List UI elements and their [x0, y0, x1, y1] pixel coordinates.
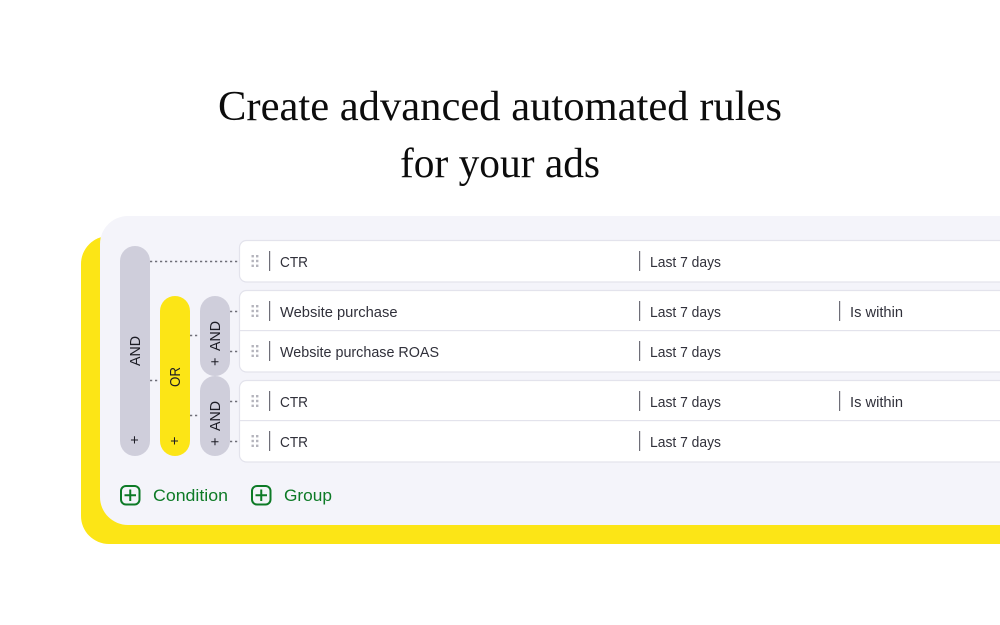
nested AND pill, bottom: AND	[208, 401, 224, 431]
condition group: CTR	[240, 380, 1000, 462]
nested AND pill, top	[200, 296, 230, 376]
outer AND pill: +	[130, 433, 139, 449]
condition group: CTR: CTR	[280, 395, 308, 411]
nested AND pill, top: AND	[208, 321, 224, 351]
title: Create advanced automated rules	[218, 84, 782, 130]
condition group: CTR: CTR	[280, 435, 308, 451]
connector lines	[150, 262, 240, 442]
condition group: website purchase: Last 7 days	[650, 305, 721, 321]
nested AND pill, bottom	[200, 376, 230, 456]
add condition button	[121, 486, 228, 505]
condition card: CTR	[240, 240, 1000, 282]
condition group: website purchase: Is within	[850, 305, 903, 321]
rule builder panel	[100, 216, 1000, 525]
add group button: Group	[284, 487, 332, 505]
OR pill	[160, 296, 190, 456]
condition card: CTR: Last 7 days	[650, 255, 721, 271]
outer AND pill: AND	[128, 336, 144, 366]
condition group: CTR: Last 7 days	[650, 435, 721, 451]
add group button	[252, 486, 332, 505]
condition group: website purchase: Website purchase ROAS	[280, 345, 439, 361]
condition group: website purchase: Website purchase	[280, 305, 398, 321]
nested AND pill, bottom: +	[208, 438, 224, 446]
condition group: CTR: Last 7 days	[650, 395, 721, 411]
OR pill: OR	[168, 367, 184, 387]
condition card: CTR: CTR	[280, 255, 308, 271]
outer AND pill	[120, 246, 150, 456]
title: for your ads	[400, 141, 600, 187]
add condition button: Condition	[153, 487, 228, 505]
yellow backing panel	[81, 236, 1000, 544]
OR pill: +	[170, 434, 179, 450]
condition group: CTR: Is within	[850, 395, 903, 411]
title	[218, 84, 782, 187]
nested AND pill, top: +	[208, 358, 224, 366]
condition group: website purchase: Last 7 days	[650, 345, 721, 361]
condition group: website purchase	[240, 290, 1000, 372]
